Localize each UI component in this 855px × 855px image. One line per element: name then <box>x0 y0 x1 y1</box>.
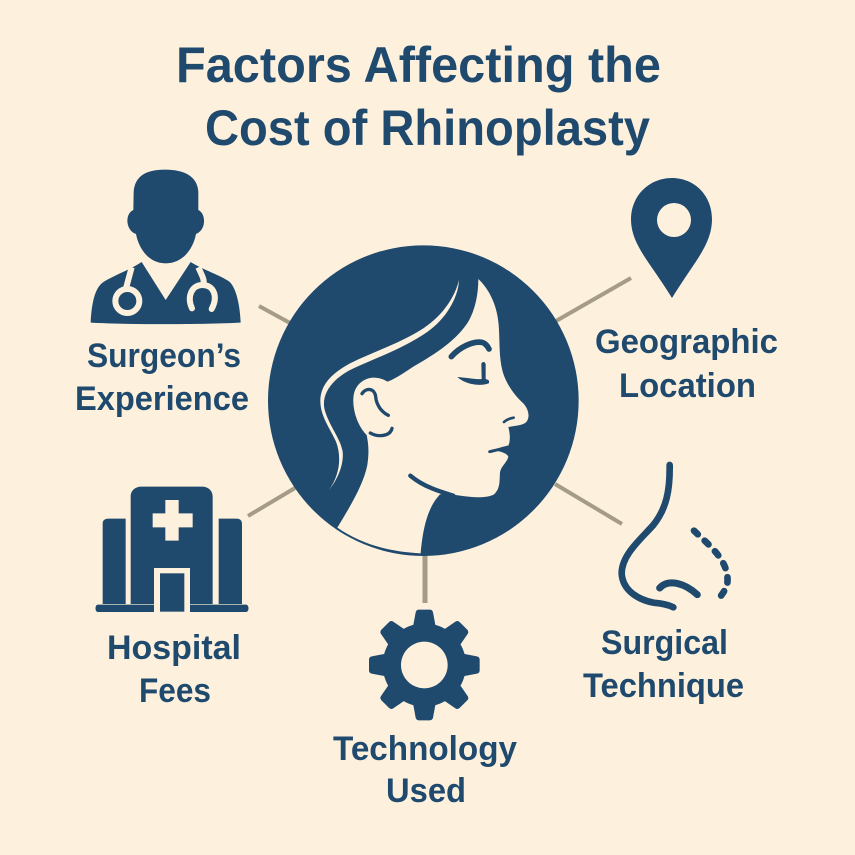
hair highlight <box>320 280 459 490</box>
eyebrow <box>451 342 489 357</box>
icon: gear <box>369 610 480 720</box>
title <box>176 37 661 156</box>
connector: hospital <box>248 488 295 516</box>
new nose dashed outline <box>694 531 728 603</box>
label: Surgeon's Experience <box>75 337 249 418</box>
title: Factors Affecting the <box>176 37 661 93</box>
label: Technology Used <box>333 730 517 810</box>
icon: surgeon <box>91 170 241 324</box>
label: Surgeon's Experience: Experience <box>75 380 249 418</box>
label: Hospital Fees: Hospital <box>107 629 241 667</box>
label: Technology Used: Used <box>386 772 466 810</box>
closed eye <box>457 362 489 385</box>
label: Surgical Technique <box>583 624 744 705</box>
nostril <box>504 418 514 422</box>
central face circle <box>268 245 579 556</box>
connector: location <box>556 278 631 321</box>
lips <box>490 447 508 452</box>
label: Technology Used: Technology <box>333 730 517 768</box>
title: Cost of Rhinoplasty <box>205 100 650 156</box>
connector: surgeon <box>259 306 290 323</box>
nostril <box>660 583 697 595</box>
connector: technique <box>555 484 622 524</box>
label: Surgical Technique: Technique <box>583 667 744 705</box>
icon: hospital <box>95 487 248 612</box>
ear detail <box>362 389 388 415</box>
stethoscope <box>115 267 215 313</box>
nose outline <box>622 465 673 607</box>
label: Geographic Location <box>595 323 778 405</box>
label: Hospital Fees <box>107 629 241 710</box>
face profile <box>337 279 529 553</box>
label: Geographic Location: Location <box>619 367 756 405</box>
surgeon shoulders <box>91 262 241 324</box>
jaw line <box>410 476 453 496</box>
surgeon head <box>127 170 204 263</box>
connector: technology <box>422 555 428 603</box>
label: Geographic Location: Geographic <box>595 323 778 361</box>
label: Surgeon's Experience: Surgeon’s <box>87 337 241 375</box>
icon: location pin <box>631 178 712 298</box>
icon: nose <box>622 465 728 607</box>
label: Hospital Fees: Fees <box>139 672 211 710</box>
label: Surgical Technique: Surgical <box>601 624 728 662</box>
